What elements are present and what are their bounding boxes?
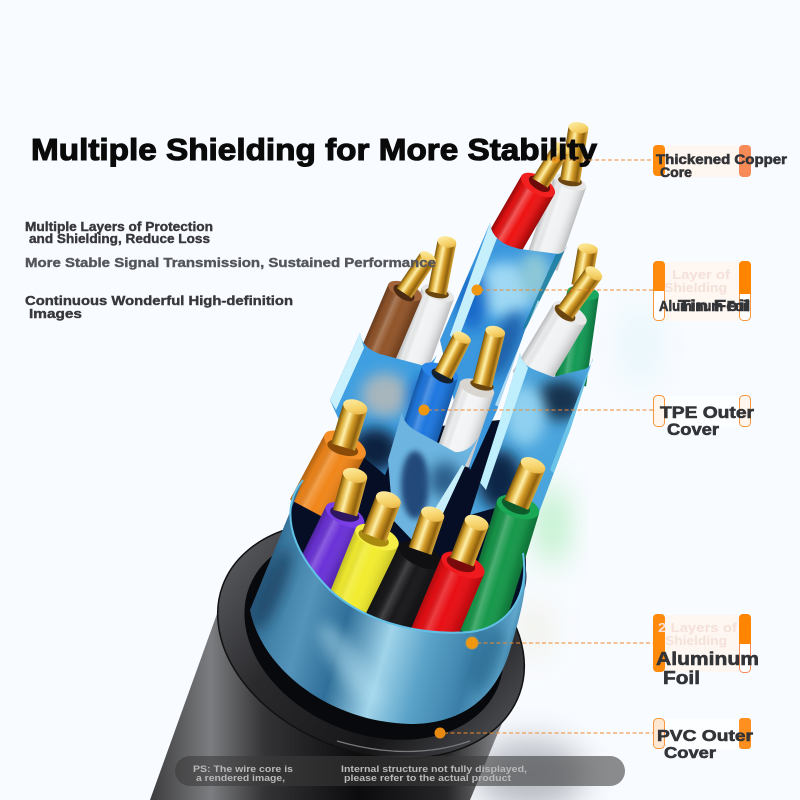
leader line and dot — [472, 284, 653, 296]
wire: red front — [405, 546, 488, 661]
foil bundle: upper — [440, 223, 567, 470]
pin: green front — [499, 453, 550, 518]
disclaimer pill: Internal structure not fully displayed, — [341, 764, 527, 774]
callout: thickened copper core: Thickened Copper — [656, 152, 788, 167]
pin: red front — [444, 511, 493, 576]
wire: white centre — [435, 375, 497, 468]
disclaimer pill — [175, 756, 625, 786]
left text: high definition — [25, 293, 293, 321]
foil bundle: right — [470, 353, 593, 515]
disclaimer pill: please refer to the actual product — [344, 773, 511, 783]
wire: black — [358, 535, 445, 650]
wire: purple — [284, 497, 368, 610]
wire bundle: centre — [397, 323, 508, 468]
wire: white upper — [525, 170, 588, 271]
cable outer body — [150, 600, 520, 800]
pin: green upper — [571, 242, 599, 288]
disclaimer pill: PS: The wire core is — [193, 764, 293, 774]
pin: red upper — [526, 138, 574, 195]
wire: white right — [513, 296, 590, 391]
pin: purple — [328, 465, 371, 525]
wire: red upper — [480, 168, 559, 267]
wire: orange — [290, 424, 370, 521]
callout: 2 layers of shielding: Aluminum — [656, 648, 759, 669]
pin: orange — [325, 395, 373, 459]
left text: protection — [25, 220, 213, 246]
leader line and dot — [552, 156, 653, 164]
leader line and dot — [418, 404, 653, 416]
leader line and dot — [466, 637, 653, 649]
callout: 1 layer of shielding: Layer of — [672, 267, 731, 282]
wire: yellow — [318, 518, 402, 638]
leader line and dot — [434, 728, 653, 738]
callout: 2 layers of shielding: Shielding — [665, 633, 727, 648]
front wires — [284, 395, 550, 661]
wire bundle: right — [513, 242, 607, 391]
left text: high definition: Images — [29, 306, 82, 321]
callout: 2 layers of shielding: Foil — [663, 667, 700, 688]
cable illustration — [150, 120, 607, 800]
callout: TPE outer cover — [418, 396, 755, 439]
wire: brown — [354, 277, 425, 379]
left text: protection: Multiple Layers of Protection — [25, 220, 213, 234]
left text: signal transmission: More Stable Signal Transmission, Sustained Performance — [25, 255, 436, 270]
callout: PVC outer cover: Cover — [664, 745, 716, 762]
callout: PVC outer cover: PVC Outer — [657, 728, 753, 745]
foil bundle: left — [330, 333, 437, 475]
disclaimer pill: a rendered image, — [196, 773, 285, 783]
callout: thickened copper core: Core — [660, 165, 693, 180]
wire: blue — [397, 359, 461, 454]
callout: 1 layer of shielding: Tin Foil — [678, 298, 750, 315]
callout: TPE outer cover: Cover — [667, 421, 720, 439]
pin: white centre — [469, 323, 508, 393]
callout: 2 layers of shielding — [466, 614, 759, 688]
foil cylinder interior — [290, 420, 526, 633]
callout: 2 layers of shielding: 2 Layers of — [658, 620, 738, 635]
callout: 1 layer of shielding: Shielding — [664, 280, 727, 295]
callout: PVC outer cover — [434, 718, 753, 762]
pin: white left — [424, 234, 460, 300]
foil bundle: centre — [388, 413, 478, 540]
foil cylinder front — [246, 480, 526, 724]
pin: white right — [552, 262, 607, 325]
wire bundle: left — [354, 234, 460, 382]
left text: protection: and Shielding, Reduce Loss — [29, 232, 210, 246]
callout: 1 layer of shielding — [472, 261, 751, 321]
wire bundle: upper — [480, 120, 591, 271]
callout: TPE outer cover: TPE Outer — [660, 404, 755, 422]
pin: black — [409, 504, 446, 555]
callout: thickened copper core — [552, 145, 788, 180]
wire: green front — [457, 490, 542, 643]
wire: green upper — [554, 284, 600, 386]
wire: white left — [392, 281, 456, 382]
pin: blue — [429, 328, 475, 387]
left text: high definition: Continuous Wonderful High-definition — [25, 293, 293, 308]
PVC collar — [184, 481, 558, 799]
title: Multiple Shielding for More Stability — [31, 132, 598, 167]
pin: brown — [391, 247, 441, 305]
callout: 1 layer of shielding: Aluminum Foil — [659, 298, 750, 315]
pin: yellow — [356, 487, 406, 550]
pin: white upper — [557, 120, 591, 188]
